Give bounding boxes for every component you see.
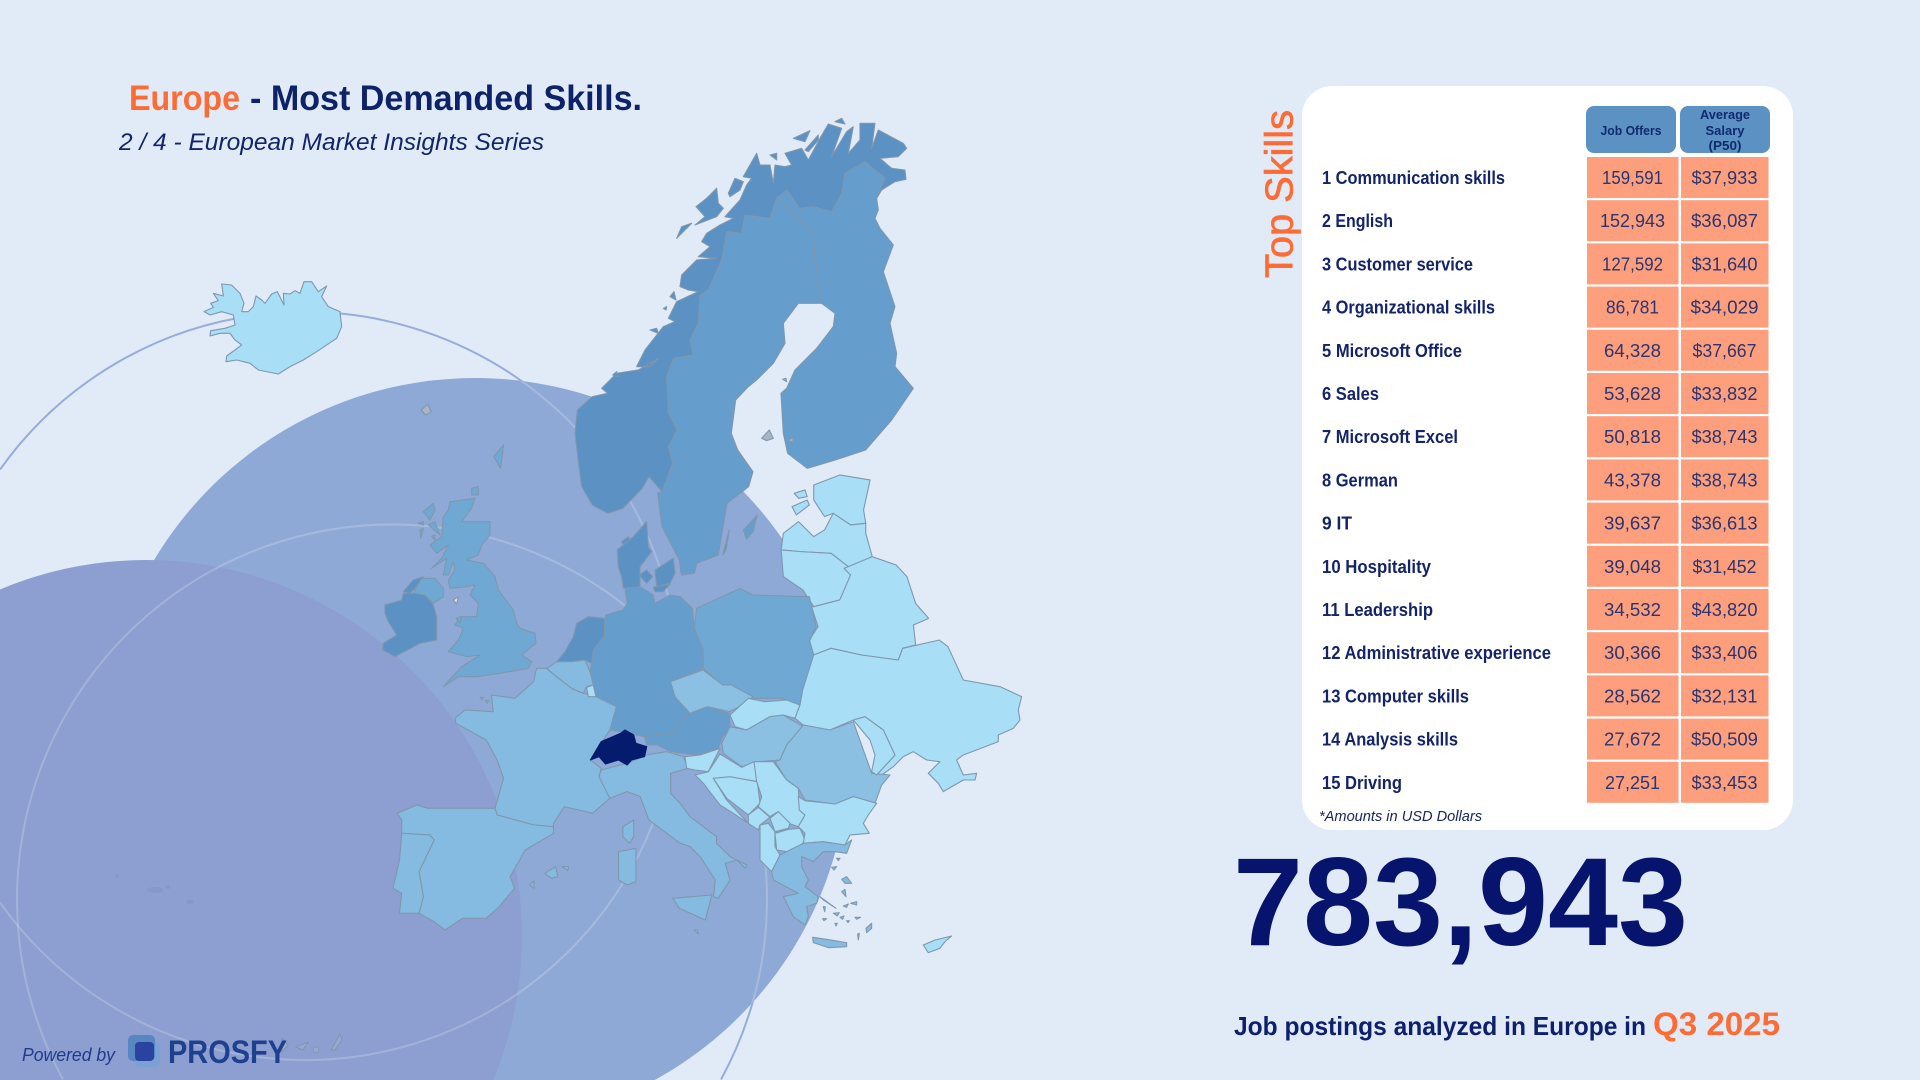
salary values: $32,131 (1692, 686, 1758, 706)
island: Oland (723, 530, 729, 555)
job offers values: 64,328 (1604, 341, 1661, 361)
islands: Hebrides (418, 503, 440, 540)
country: North Macedonia (775, 828, 805, 852)
salary values: $43,820 (1692, 600, 1758, 620)
job offers values: 53,628 (1604, 384, 1661, 404)
islands: Balearics (530, 867, 569, 888)
job offers values: 159,591 (1602, 168, 1663, 188)
subtitle: 2 / 4 - European Market Insights Series (118, 129, 544, 156)
country: Finland (777, 162, 913, 468)
island: Cyprus (923, 936, 952, 953)
country: Luxembourg (587, 685, 596, 697)
job offers values: 152,943 (1600, 211, 1665, 231)
job offers values: 50,818 (1604, 427, 1661, 447)
skill names: 10 Hospitality (1322, 557, 1431, 577)
job offers values: 127,592 (1602, 254, 1663, 274)
job offers values: 34,532 (1604, 600, 1661, 620)
skill names: 5 Microsoft Office (1322, 341, 1462, 361)
salary values: $36,613 (1692, 514, 1758, 534)
country: Lithuania (781, 550, 853, 607)
country: Norway (575, 123, 907, 513)
country: Romania (775, 722, 890, 804)
island: Sicily (673, 895, 712, 920)
country: Italy (599, 752, 747, 898)
skill names: 6 Sales (1322, 384, 1379, 404)
caption (1234, 1006, 1780, 1042)
skill names: 9 IT (1322, 514, 1352, 534)
island: Anglesey (456, 617, 462, 623)
British Isles and Benelux group (383, 487, 675, 703)
country: Serbia (754, 762, 805, 827)
salary values: $37,667 (1692, 341, 1756, 361)
island: Corsica (623, 820, 634, 843)
Nordic countries group (575, 118, 913, 575)
job offers values: 28,562 (1604, 686, 1661, 706)
salary values: $33,453 (1692, 773, 1758, 793)
country: Portugal (393, 833, 434, 913)
salary values (1690, 168, 1758, 793)
skill names: 3 Customer service (1322, 254, 1473, 274)
islands: Orkney (472, 487, 478, 495)
country: Moldova (853, 717, 895, 775)
job offers values: 27,672 (1604, 730, 1661, 750)
header: Average Salary: Salary (1706, 124, 1745, 138)
job offers values: 86,781 (1606, 298, 1659, 318)
salary values: $36,087 (1691, 211, 1758, 231)
country: Switzerland (590, 730, 647, 765)
country: Germany (590, 587, 703, 737)
skill names: 1 Communication skills (1322, 168, 1505, 188)
island: Crete (813, 937, 847, 948)
salary values: $37,933 (1692, 168, 1758, 188)
country: Albania (760, 823, 780, 872)
job offers values (1600, 168, 1665, 793)
country: Belarus (809, 557, 929, 660)
islands: northern Norway (613, 118, 845, 377)
islands: Aland (762, 378, 793, 442)
background circles (0, 312, 849, 1080)
country: Slovenia (685, 748, 720, 772)
job offers values: 27,251 (1605, 773, 1660, 793)
value cells (1587, 157, 1768, 803)
header: Average Salary (1680, 106, 1770, 153)
salary values: $50,509 (1691, 730, 1758, 750)
eastern and Balkan group (685, 640, 1022, 953)
islands: Canary (282, 1034, 342, 1053)
salary values: $38,743 (1692, 427, 1758, 447)
card (1302, 86, 1793, 830)
country: Greece (772, 840, 852, 925)
title: Europe (129, 79, 240, 118)
title: - Most Demanded Skills. (250, 79, 642, 118)
country: France (455, 668, 616, 827)
region: Northern Ireland (413, 578, 443, 603)
skill names: 14 Analysis skills (1322, 730, 1458, 750)
skill names: 4 Organizational skills (1322, 298, 1495, 318)
islands: Channel (480, 697, 489, 703)
country: Bulgaria (798, 797, 877, 845)
powered by logo (22, 1034, 287, 1070)
header: Average Salary: (P50) (1708, 139, 1742, 153)
Baltic and north-central group (421, 404, 872, 607)
country: Montenegro (748, 807, 770, 830)
island: Sardinia (619, 848, 636, 885)
country: Netherlands (557, 617, 605, 663)
country: Slovakia (730, 698, 800, 730)
job offers values: 43,378 (1604, 470, 1661, 490)
central and southern Europe group (393, 557, 929, 930)
skill names: 11 Leadership (1322, 600, 1433, 620)
country: United Kingdom (430, 498, 536, 687)
map of Europe (115, 118, 1022, 1053)
big number: 783,943 (1233, 833, 1688, 972)
footnote: *Amounts in USD Dollars (1319, 809, 1482, 825)
caption: Q3 2025 (1653, 1006, 1780, 1042)
vertical heading: Top Skills: Top Skills (1258, 110, 1302, 278)
country: Austria (645, 707, 730, 755)
island: Isle of Man (453, 597, 458, 604)
salary values: $33,406 (1692, 643, 1758, 663)
country: Latvia (781, 513, 872, 568)
powered by logo: Powered by (22, 1044, 117, 1065)
islands: Danish (639, 558, 675, 592)
salary values: $34,029 (1690, 298, 1758, 318)
islands: Estonia (792, 490, 809, 515)
island: Gotland (743, 515, 757, 539)
panel: top skills table (1302, 86, 1793, 830)
country: Spain (397, 805, 553, 930)
country: Poland (694, 588, 820, 705)
country: Bosnia and Herzegovina (713, 777, 760, 815)
skill names: 15 Driving (1322, 773, 1402, 793)
country: Ukraine (795, 640, 1022, 792)
job offers values: 30,366 (1604, 643, 1661, 663)
skill names (1322, 168, 1551, 793)
salary values: $38,743 (1692, 470, 1758, 490)
islands: Azores (115, 874, 194, 904)
skill names: 2 English (1322, 211, 1393, 231)
header: Job Offers: Job Offers (1600, 124, 1662, 138)
skill names: 7 Microsoft Excel (1322, 427, 1458, 447)
icon: Prosfy mark (128, 1035, 160, 1067)
country: Iceland (204, 282, 342, 374)
salary values: $31,452 (1692, 557, 1756, 577)
country: Sweden (658, 198, 822, 575)
skill names: 12 Administrative experience (1322, 643, 1551, 663)
islands: Aegean (820, 858, 872, 940)
job offers values: 39,048 (1604, 557, 1661, 577)
header: Average Salary: Average (1700, 108, 1750, 122)
country: Denmark (617, 522, 652, 588)
country: Hungary (722, 715, 803, 767)
salary values: $31,640 (1692, 254, 1758, 274)
caption: Job postings analyzed in Europe in (1234, 1011, 1646, 1041)
island: Shetland (494, 445, 504, 468)
country: Czechia (671, 670, 753, 713)
powered by logo: PROSFY (168, 1034, 287, 1070)
salary values: $33,832 (1692, 384, 1758, 404)
skill names: 13 Computer skills (1322, 686, 1469, 706)
country: Kosovo (770, 812, 790, 832)
country: Croatia (695, 754, 758, 823)
country: Estonia (814, 475, 870, 525)
skill names: 8 German (1322, 470, 1398, 490)
islands: Faroe (421, 404, 431, 415)
header: Job Offers (1586, 106, 1676, 153)
job offers values: 39,637 (1604, 514, 1661, 534)
country: Ireland (383, 577, 437, 657)
island: Malta (694, 930, 698, 934)
country: Belgium (547, 660, 593, 693)
